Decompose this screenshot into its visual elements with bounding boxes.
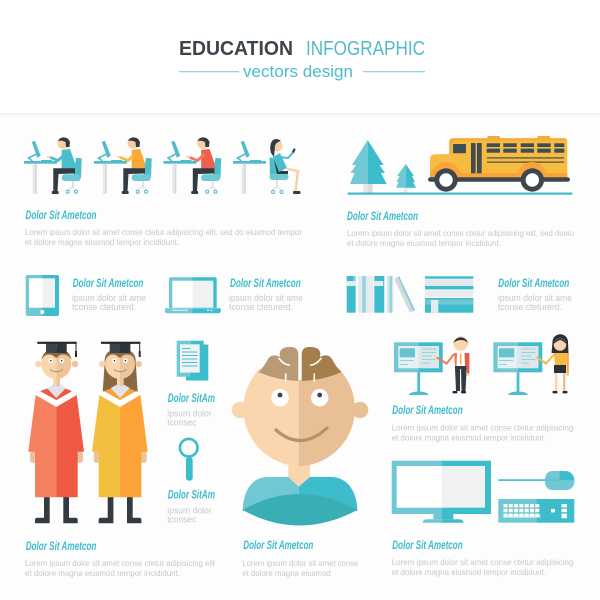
text block: Lorem ipsum dolor sit amet conse ctetur adipisicing elit [25,558,216,568]
heading: Dolor Sit Ametcon [347,211,418,223]
panel: tablet [26,275,146,316]
text block: Lorem ipsum dolor sit amet conse [242,558,359,568]
text block [498,293,572,312]
illustration: seated man orange [94,137,152,194]
illustration: man presenting [394,336,469,395]
heading: Dolor Sit Ametcon [26,210,96,222]
text block: et dolore magna eiusmod [242,568,331,578]
heading: Dolor SitAm [168,490,215,502]
text block: ipsum dolor sit ame [72,293,146,303]
icon: stacked books [425,276,473,313]
icon: large tree [350,140,387,193]
heading: Dolor Sit Ametcon [73,278,143,290]
smile [276,428,327,441]
illustration: seated man red [164,137,221,194]
text block: tconse cteturerd. [72,302,136,312]
text block: tconsec [167,418,197,428]
panel: head with brain [232,347,368,578]
panel: books [347,276,572,313]
header band [0,0,600,117]
icon: keyboard [498,499,574,523]
brain [258,347,342,381]
title: education: EDUCATION [179,38,293,60]
eyes [271,389,328,406]
illustration: student head [232,347,368,526]
heading: Dolor Sit Ametcon [243,540,313,552]
panel: desktop computer [392,461,574,577]
text block: ipsum dolor sit ame [229,293,303,303]
panel: school bus [347,136,574,248]
text block: Lorem ipsum dolor sit amet conse ctetur adipisicing [392,422,574,432]
text block: tconse cteturerd. [498,302,562,312]
ears [232,402,368,418]
heading: Dolor Sit Ametcon [230,278,301,290]
text block: Lorem ipsum dolor sit amet conse ctetur adipisicing elit, sed doeiu [347,228,574,238]
illustration: seated man blue [24,137,82,194]
text block: et dolore magna eiusmod tempor incididunt. [347,238,501,248]
illustration: school bus [428,136,570,192]
text block [392,557,574,577]
text block [25,558,216,578]
heading: Dolor SitAm [168,393,215,405]
title: infographic: INFOGRAPHIC [306,38,425,60]
text block [392,422,574,442]
subtitle: vectors design [243,62,353,81]
icon: laptop [165,277,221,313]
text block [229,293,303,312]
heading: Dolor Sit Ametcon [392,405,463,417]
neck [288,460,310,487]
panel: graduates [25,341,216,578]
text block [242,558,359,578]
icon: upright books [347,276,415,313]
icon: tablet [26,275,59,316]
text block: tconsec [167,514,197,524]
icon: documents [177,341,208,380]
text block [72,293,146,312]
panel: computer workers [24,137,302,247]
text block [347,228,574,248]
illustration: male graduate [28,342,84,523]
heading: Dolor Sit Ametcon [498,278,569,290]
text block: et dolore magna eiusmod tempor incididunt. [392,567,546,577]
icon: mouse [498,471,574,490]
text block [167,409,212,428]
text block: ipsum dolor sit ame [498,293,572,303]
illustration: woman presenting [493,334,569,395]
face [243,368,355,466]
illustration: female graduate [92,342,148,523]
text block: et dolore magna eiusmod tempor incididunt. [25,237,179,247]
icon: monitor [392,461,491,523]
ground [348,192,572,195]
text block: Lorem ipsum dolor sit amet conse ctetur adipisicing [392,557,574,567]
shoulders [243,477,357,526]
text block: Lorem ipsum dolor sit amet conse ctetur adipisicing elit, sed do eiusmod tempor [25,227,302,237]
icon: small tree [396,164,416,192]
heading: Dolor Sit Ametcon [26,541,96,553]
heading: Dolor Sit Ametcon [392,540,463,552]
text block: ipsum dolor [167,505,212,515]
text block: ipsum dolor [167,409,212,419]
illustration: seated woman with phone [233,139,300,194]
text block [25,227,302,247]
panel: laptop [165,277,303,313]
text block: tconse cteturerd. [229,302,293,312]
text block: et dolore magna eiusmod tempor incididunt. [392,432,546,442]
icon: magnifier [180,439,198,481]
text block: et dolore magna eiusmod tempor incididunt. [25,568,180,578]
text block [167,505,212,524]
panel: presenters [392,334,574,442]
